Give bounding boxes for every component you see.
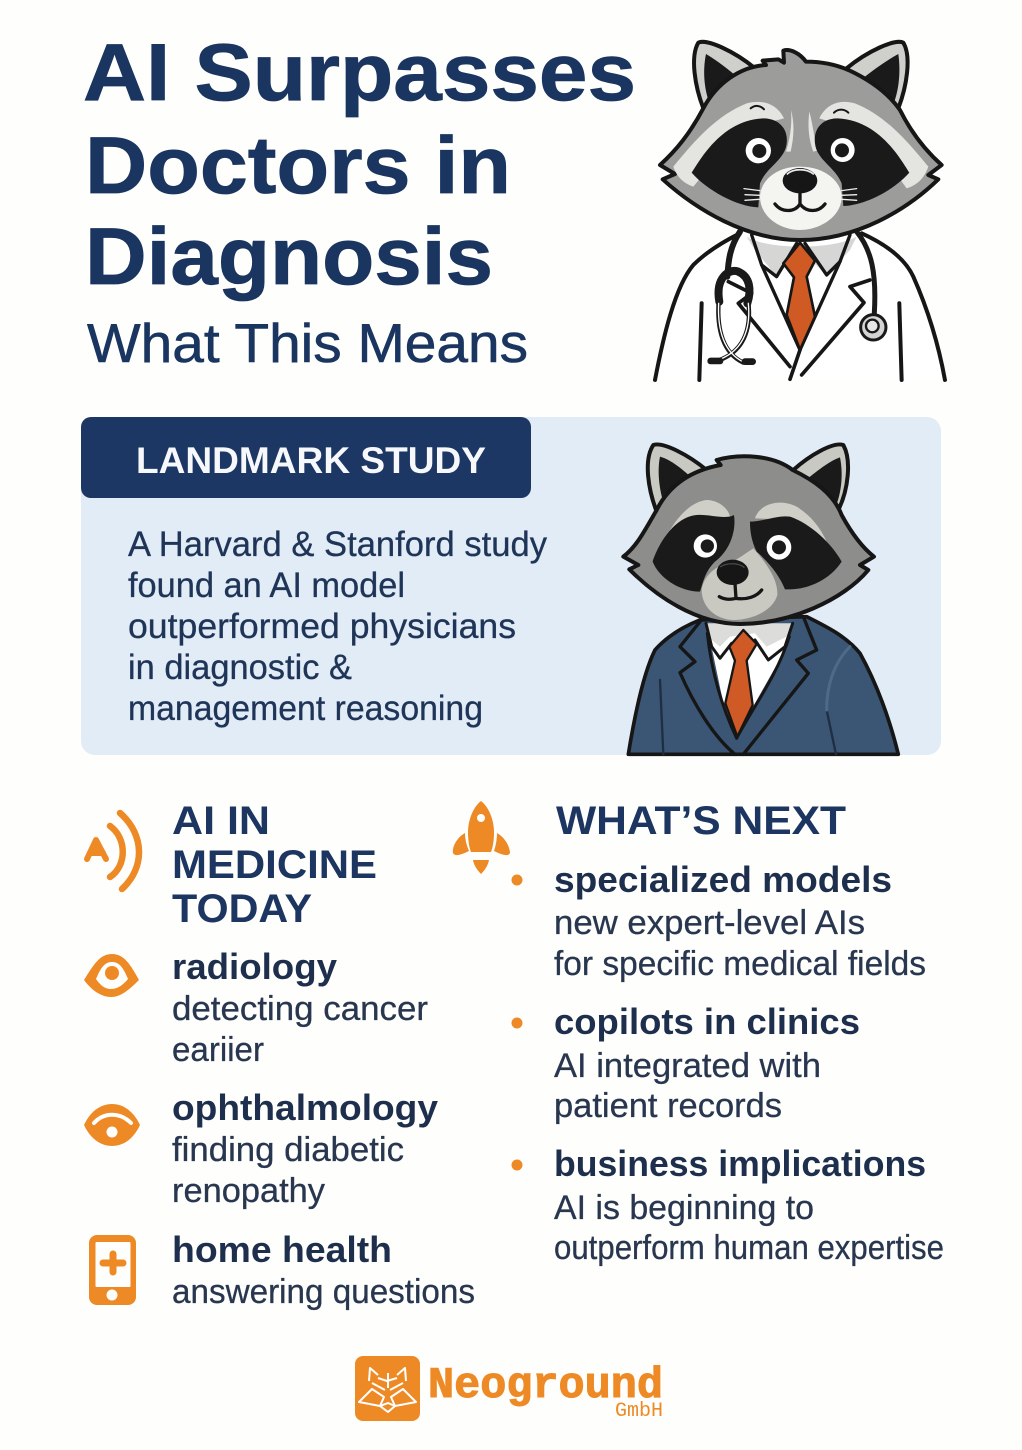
item: home health: answering questions xyxy=(172,1273,475,1311)
banner: landmark study: LANDMARK STUDY xyxy=(136,440,486,481)
heading: TODAY xyxy=(172,887,312,931)
item: radiology: eariier xyxy=(172,1031,264,1069)
eyes xyxy=(694,534,717,558)
item: home health: home health xyxy=(172,1229,392,1270)
ears xyxy=(694,42,755,108)
item: business implications: business implications xyxy=(554,1143,926,1184)
item: business implications xyxy=(554,1143,944,1267)
nose and mouth xyxy=(717,560,749,585)
stethoscope xyxy=(711,232,886,363)
item: ophthalmology: ophthalmology xyxy=(172,1087,438,1128)
banner: landmark study xyxy=(81,417,531,498)
illustration: raccoon in suit xyxy=(623,444,898,754)
eyes xyxy=(746,138,771,163)
item: radiology: radiology xyxy=(172,946,337,987)
title: AI Surpasses xyxy=(83,28,636,118)
nose and mouth xyxy=(783,168,817,193)
section: AI in medicine today xyxy=(84,799,475,1311)
item: copilots in clinics: AI integrated with xyxy=(554,1047,821,1085)
logo: Neoground GmbH: GmbH xyxy=(615,1400,663,1423)
subtitle: What This Means xyxy=(87,312,528,374)
icon: rocket xyxy=(453,801,510,874)
bullet xyxy=(512,1160,522,1170)
item: copilots in clinics: copilots in clinics xyxy=(554,1001,860,1042)
title: Diagnosis xyxy=(85,212,493,302)
icon: AI signal xyxy=(87,813,139,889)
panel: landmark study xyxy=(81,417,941,755)
item: radiology xyxy=(172,946,428,1069)
heading: MEDICINE xyxy=(172,843,377,887)
eye masks xyxy=(653,515,734,592)
item: business implications: AI is beginning to xyxy=(554,1189,814,1227)
item: ophthalmology xyxy=(172,1087,438,1210)
study description: A Harvard & Stanford study xyxy=(128,525,547,564)
title: Doctors in xyxy=(85,121,511,211)
study description: in diagnostic & xyxy=(128,648,352,687)
heading: AI IN xyxy=(172,799,270,843)
icon: phone with cross xyxy=(89,1235,136,1305)
study description: outperformed physicians xyxy=(128,607,516,646)
muzzle xyxy=(760,167,842,230)
bullet xyxy=(512,874,522,886)
item: ophthalmology: renopathy xyxy=(172,1172,325,1210)
item: specialized models xyxy=(554,859,926,983)
study description xyxy=(128,525,547,728)
item: copilots in clinics xyxy=(554,1001,860,1125)
item: specialized models: specialized models xyxy=(554,859,892,900)
heading: WHAT’S NEXT xyxy=(556,799,846,843)
logo: Neoground GmbH: Neoground xyxy=(428,1361,663,1411)
item: home health xyxy=(172,1229,475,1311)
heading xyxy=(172,799,377,931)
eye masks xyxy=(692,118,787,207)
study description: management reasoning xyxy=(128,689,483,728)
item: radiology: detecting cancer xyxy=(172,990,428,1028)
item: specialized models: new expert-level AIs xyxy=(554,904,865,942)
item: copilots in clinics: patient records xyxy=(554,1087,782,1125)
icon: eye xyxy=(84,954,139,997)
item: business implications: outperform human expertise xyxy=(554,1229,944,1267)
logo: Neoground GmbH xyxy=(355,1356,663,1423)
logo mark: fox xyxy=(355,1356,420,1421)
study description: found an AI model xyxy=(128,566,405,605)
illustration: raccoon doctor xyxy=(655,42,945,380)
item: specialized models: for specific medical fields xyxy=(554,945,926,983)
title xyxy=(83,28,636,302)
muzzle xyxy=(702,548,777,620)
necktie xyxy=(783,243,815,350)
bullet xyxy=(512,1018,522,1028)
icon: retina eye xyxy=(84,1104,140,1146)
section: what's next xyxy=(453,799,944,1267)
head xyxy=(660,50,942,240)
item: ophthalmology: finding diabetic xyxy=(172,1131,404,1169)
